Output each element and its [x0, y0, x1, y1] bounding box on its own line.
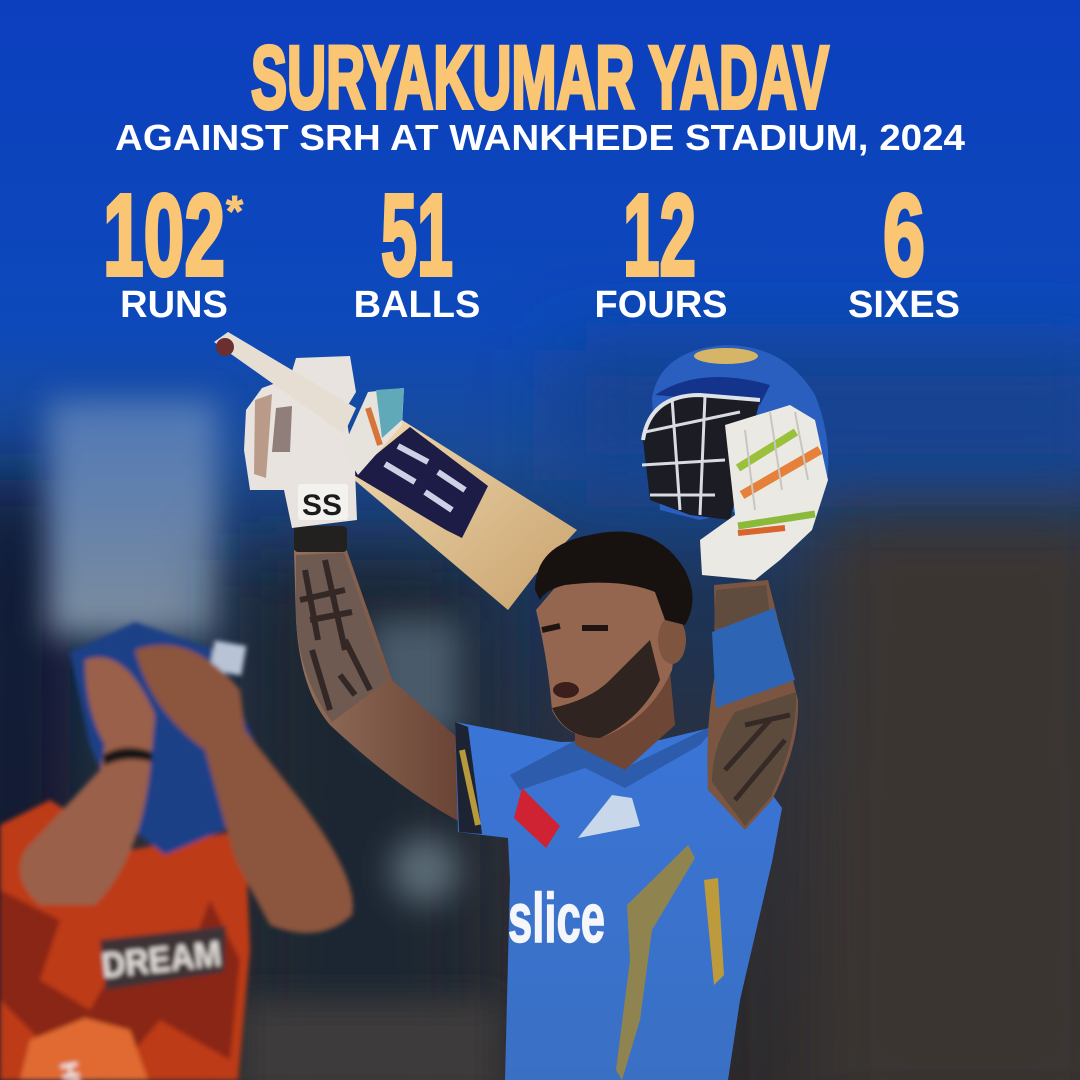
value 12: 12	[623, 170, 696, 300]
bat blade	[352, 420, 577, 610]
mouth	[553, 682, 579, 698]
subtitle: AGAINST SRH AT WANKHEDE STADIUM, 2024	[115, 117, 965, 158]
ear	[658, 616, 686, 664]
glove SS mark	[298, 484, 348, 520]
raised arms	[20, 657, 155, 905]
stat: balls	[354, 170, 480, 326]
value 51: 51	[381, 170, 453, 300]
beard	[552, 640, 660, 738]
helmet grille	[643, 395, 760, 520]
stat: sixes	[848, 170, 960, 326]
helmet crest	[694, 348, 758, 364]
team crest	[578, 795, 640, 838]
blue wristband	[712, 608, 795, 708]
neck and head	[535, 532, 692, 770]
face	[536, 570, 680, 738]
bat grip end	[216, 338, 234, 356]
hair	[535, 532, 692, 625]
left batting glove	[214, 332, 404, 528]
orange cap	[20, 1018, 148, 1080]
main player	[214, 332, 828, 1080]
towel tag	[210, 640, 246, 676]
orange jersey	[0, 800, 250, 1080]
gold jersey panel	[616, 845, 695, 1080]
sponsor text: DREAM	[100, 933, 223, 986]
jersey	[455, 722, 782, 1080]
helmet	[642, 345, 828, 520]
background player in orange jersey	[0, 622, 353, 1080]
wristband	[103, 748, 152, 766]
label runs: RUNS	[120, 284, 228, 326]
sleeve trim	[455, 722, 482, 834]
eyes	[542, 626, 608, 630]
sponsor patch	[100, 926, 226, 990]
sponsor badge	[514, 788, 560, 848]
label balls: BALLS	[354, 284, 480, 326]
glove green and orange stripes	[738, 432, 796, 468]
value 6: 6	[883, 170, 925, 300]
label sixes: SIXES	[848, 284, 960, 326]
right arm with tattoos	[707, 580, 798, 830]
slice logo: slice	[508, 879, 605, 957]
SS logo on bat	[352, 427, 488, 538]
bat	[352, 420, 577, 610]
blue towel	[70, 622, 258, 855]
asterisk: *	[226, 187, 244, 236]
bat handle	[214, 332, 356, 434]
glove thumb	[342, 388, 404, 475]
label fours: FOURS	[594, 284, 728, 326]
wrist band	[294, 526, 347, 552]
glove SS text: SS	[302, 489, 342, 522]
right hand glove	[700, 405, 828, 580]
stat: runs	[103, 170, 244, 326]
left arm with tattoos	[294, 526, 460, 822]
stat: fours	[594, 170, 728, 326]
tattoo sleeve	[296, 553, 388, 722]
value 102: 102	[103, 170, 225, 300]
collar	[510, 722, 720, 790]
